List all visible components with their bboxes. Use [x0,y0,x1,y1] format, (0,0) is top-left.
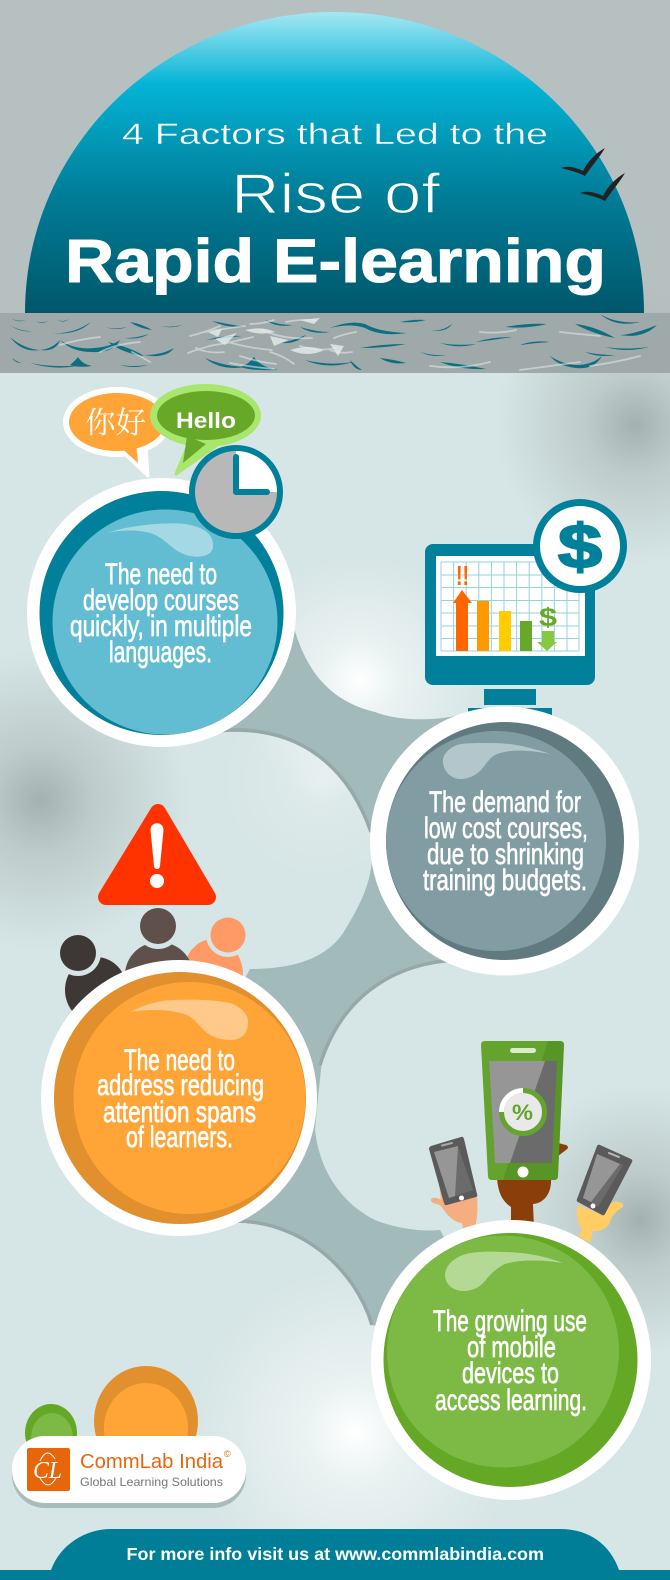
text: factor 4: devices to [462,1357,559,1390]
panel: factor 1 bubbles and clock behind circle [63,384,261,476]
bar chart: !! [456,560,469,591]
title: Rapid E-learning [65,227,606,295]
text: factor 1: languages. [109,636,212,669]
icon: chinese speech bubble: 你好 [85,398,146,442]
footer banner: For more info visit us at www.commlabindia.com [126,1544,544,1564]
icon: hands holding phones [429,1041,632,1243]
bar chart [453,560,558,651]
panel: factor 1 circle [27,478,296,747]
connector shape between circles [161,612,511,1360]
icon: clock [192,448,280,536]
icon: hello speech bubble [150,384,261,474]
icon: left hand and phone [429,1137,477,1234]
panel: factor 2 circle [370,706,639,976]
text: factor 3: of learners. [126,1121,233,1154]
text: factor 4 [433,1305,587,1417]
icon: group of people [60,908,246,1011]
title dome [25,12,644,313]
panel: factor 3 circle [41,960,317,1236]
decorative ovals behind logo [25,1366,198,1476]
text: factor 2: low cost courses, [424,812,588,845]
footer banner [0,1529,670,1580]
icon: monitor with bar chart [425,544,595,716]
text: factor 1: The need to [105,558,217,591]
logo: CommLab India: Global Learning Solutions [80,1475,223,1489]
icon: dollar badge [536,502,624,590]
sea band with waves [0,313,670,373]
bar chart: $ [539,602,558,632]
text: factor 1: develop courses [83,584,239,617]
logo: CommLab India: © [224,1449,231,1459]
logo: CommLab India: CommLab India [80,1451,224,1473]
text: factor 3 [97,1044,264,1154]
text: factor 3: The need to [124,1044,235,1077]
text: factor 3: attention spans [103,1096,256,1129]
text: factor 2 [423,786,588,897]
text: factor 4: access learning. [435,1384,587,1417]
icon: percentage donut: % [512,1100,533,1125]
text: factor 2: due to shrinking [427,838,584,871]
icon: dollar badge: $ [558,513,602,582]
text: factor 2: training budgets. [423,864,587,897]
icon: hello speech bubble: Hello [176,408,236,433]
icon: birds [561,148,625,201]
text: factor 4: of mobile [467,1331,556,1364]
title [65,118,606,295]
logo: CommLab India [12,1436,246,1508]
title: Rise of [231,162,440,226]
panel: factor 4 circle [371,1220,651,1500]
text: factor 1 [70,558,252,669]
text: factor 2: The demand for [429,786,581,819]
text: factor 3: address reducing [97,1069,264,1102]
icon: right hand and phone [577,1145,632,1243]
icon: warning triangle [106,812,208,897]
text: factor 4: The growing use [433,1305,587,1338]
icon: percentage donut [502,1090,544,1134]
text: factor 1: quickly, in multiple [70,610,252,643]
title: 4 Factors that Led to the [122,118,548,151]
icon: chinese speech bubble [63,387,171,476]
logo: CommLab India: CL [33,1458,62,1484]
sky background [0,0,670,320]
icon: centre hand and phone [481,1041,568,1228]
